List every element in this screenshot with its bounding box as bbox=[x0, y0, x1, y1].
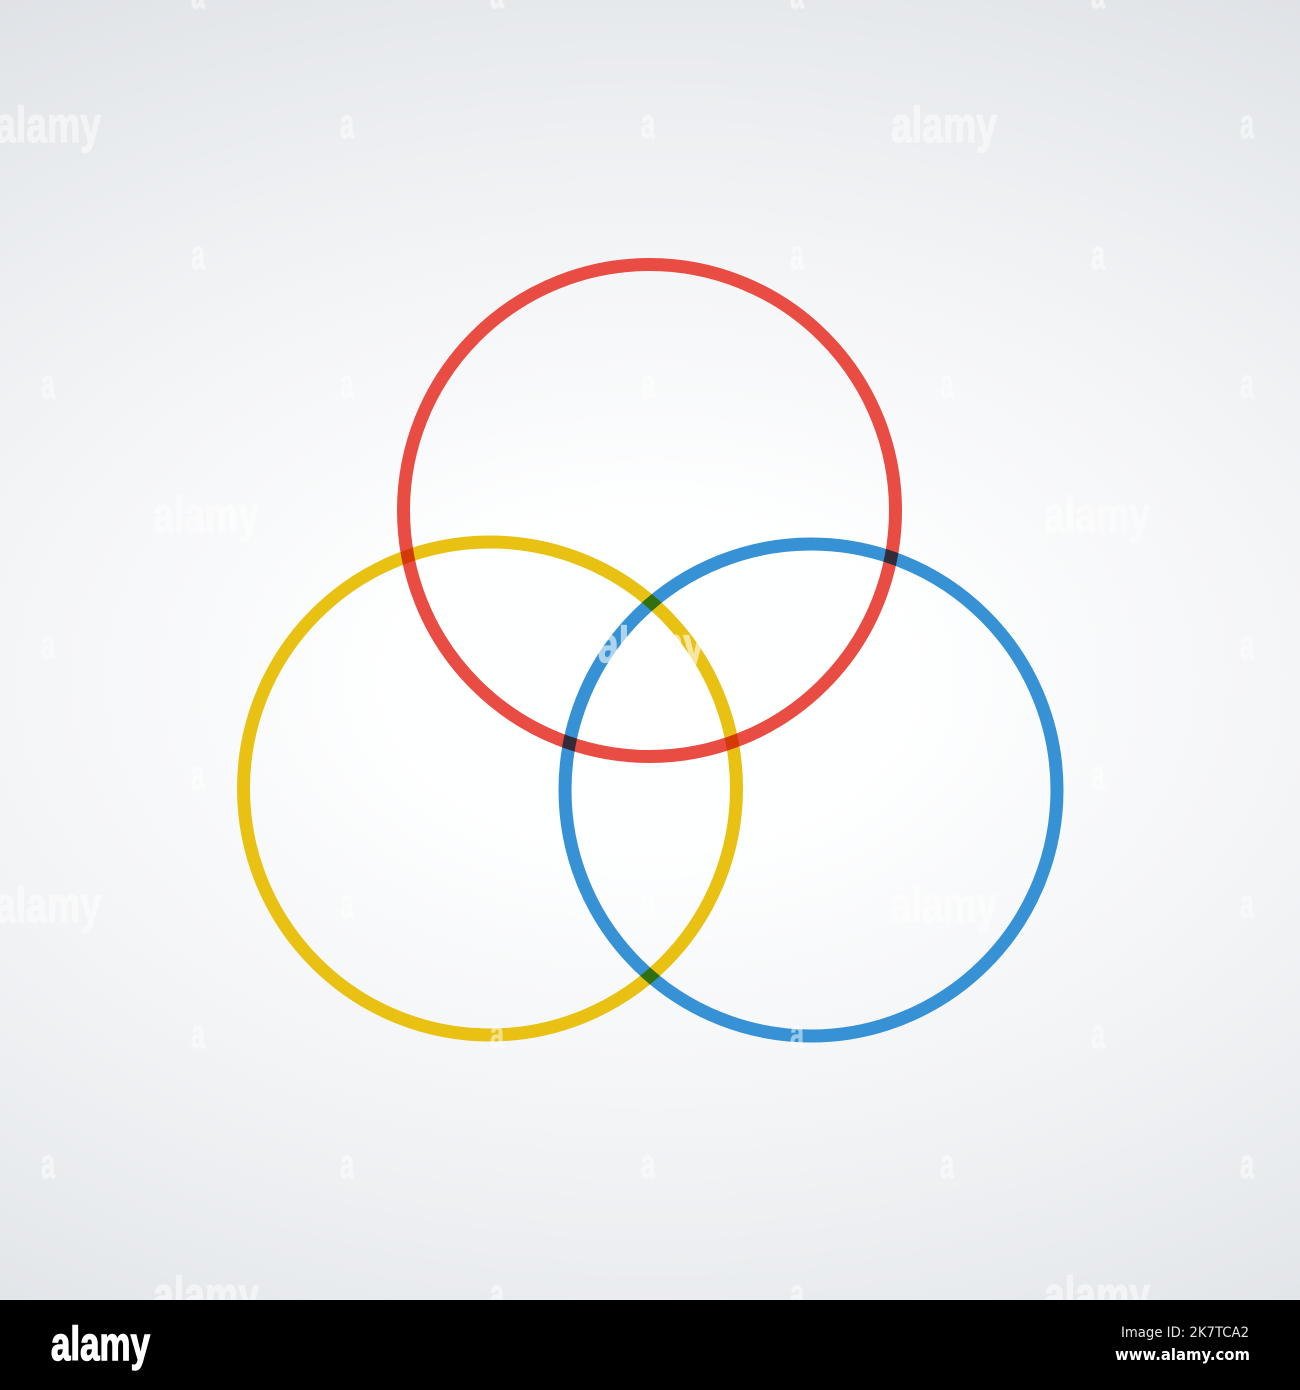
watermarks: repeated alamy marks: alamy bbox=[153, 487, 259, 543]
venn diagram: three overlapping rings bbox=[244, 264, 1057, 1036]
watermarks: repeated alamy marks: a bbox=[490, 1270, 504, 1317]
watermarks: repeated alamy marks: a bbox=[641, 880, 655, 927]
watermarks: repeated alamy marks: alamy bbox=[891, 877, 997, 933]
watermarks: repeated alamy marks: a bbox=[940, 360, 954, 407]
watermarks: repeated alamy marks: a bbox=[1091, 231, 1105, 278]
watermarks: repeated alamy marks: a bbox=[191, 1010, 205, 1057]
footer bar bbox=[0, 1300, 1300, 1390]
watermarks: repeated alamy marks: a bbox=[1240, 360, 1254, 407]
watermarks: repeated alamy marks: alamy bbox=[891, 97, 997, 153]
watermarks: repeated alamy marks: a bbox=[790, 1010, 804, 1057]
watermarks: repeated alamy marks: a bbox=[1240, 880, 1254, 927]
footer text: website: www.alamy.com bbox=[1115, 1345, 1250, 1364]
watermarks: repeated alamy marks: a bbox=[1240, 1140, 1254, 1187]
watermarks: repeated alamy marks: a bbox=[340, 100, 354, 147]
watermarks: repeated alamy marks: a bbox=[790, 1270, 804, 1317]
watermarks: repeated alamy marks: a bbox=[1240, 621, 1254, 668]
watermarks: repeated alamy marks: a bbox=[641, 100, 655, 147]
footer logo: alamy: alamy bbox=[51, 1317, 150, 1370]
watermarks: repeated alamy marks: a bbox=[641, 1140, 655, 1187]
ring: blue right circle bbox=[565, 544, 1057, 1036]
watermarks: repeated alamy marks: a bbox=[41, 360, 55, 407]
watermarks: repeated alamy marks: alamy bbox=[1044, 1267, 1150, 1323]
ring: yellow left circle bbox=[244, 542, 736, 1035]
watermarks: repeated alamy marks: a bbox=[41, 1140, 55, 1187]
watermarks: repeated alamy marks: a bbox=[1091, 1010, 1105, 1057]
watermarks: repeated alamy marks: a bbox=[340, 360, 354, 407]
watermarks: repeated alamy marks: a bbox=[641, 360, 655, 407]
watermarks: repeated alamy marks: a bbox=[1091, 751, 1105, 798]
watermarks: repeated alamy marks: a bbox=[340, 1140, 354, 1187]
watermarks: repeated alamy marks: a bbox=[490, 1010, 504, 1057]
watermarks: repeated alamy marks: a bbox=[191, 751, 205, 798]
watermarks: repeated alamy marks: alamy bbox=[153, 1267, 259, 1323]
ring: red top circle bbox=[404, 264, 896, 756]
watermarks: repeated alamy marks: a bbox=[940, 1140, 954, 1187]
watermarks: repeated alamy marks: alamy bbox=[1044, 487, 1150, 543]
watermark: alamy mark over the centre of the rings: alamy bbox=[598, 617, 704, 673]
watermarks: repeated alamy marks: a bbox=[1240, 100, 1254, 147]
watermarks: repeated alamy marks: a bbox=[790, 231, 804, 278]
footer text: image id: Image ID: 2K7TCA2 bbox=[1121, 1325, 1249, 1341]
watermarks: repeated alamy marks: a bbox=[340, 880, 354, 927]
watermarks: repeated alamy marks: a bbox=[41, 621, 55, 668]
watermarks: repeated alamy marks: a bbox=[191, 231, 205, 278]
